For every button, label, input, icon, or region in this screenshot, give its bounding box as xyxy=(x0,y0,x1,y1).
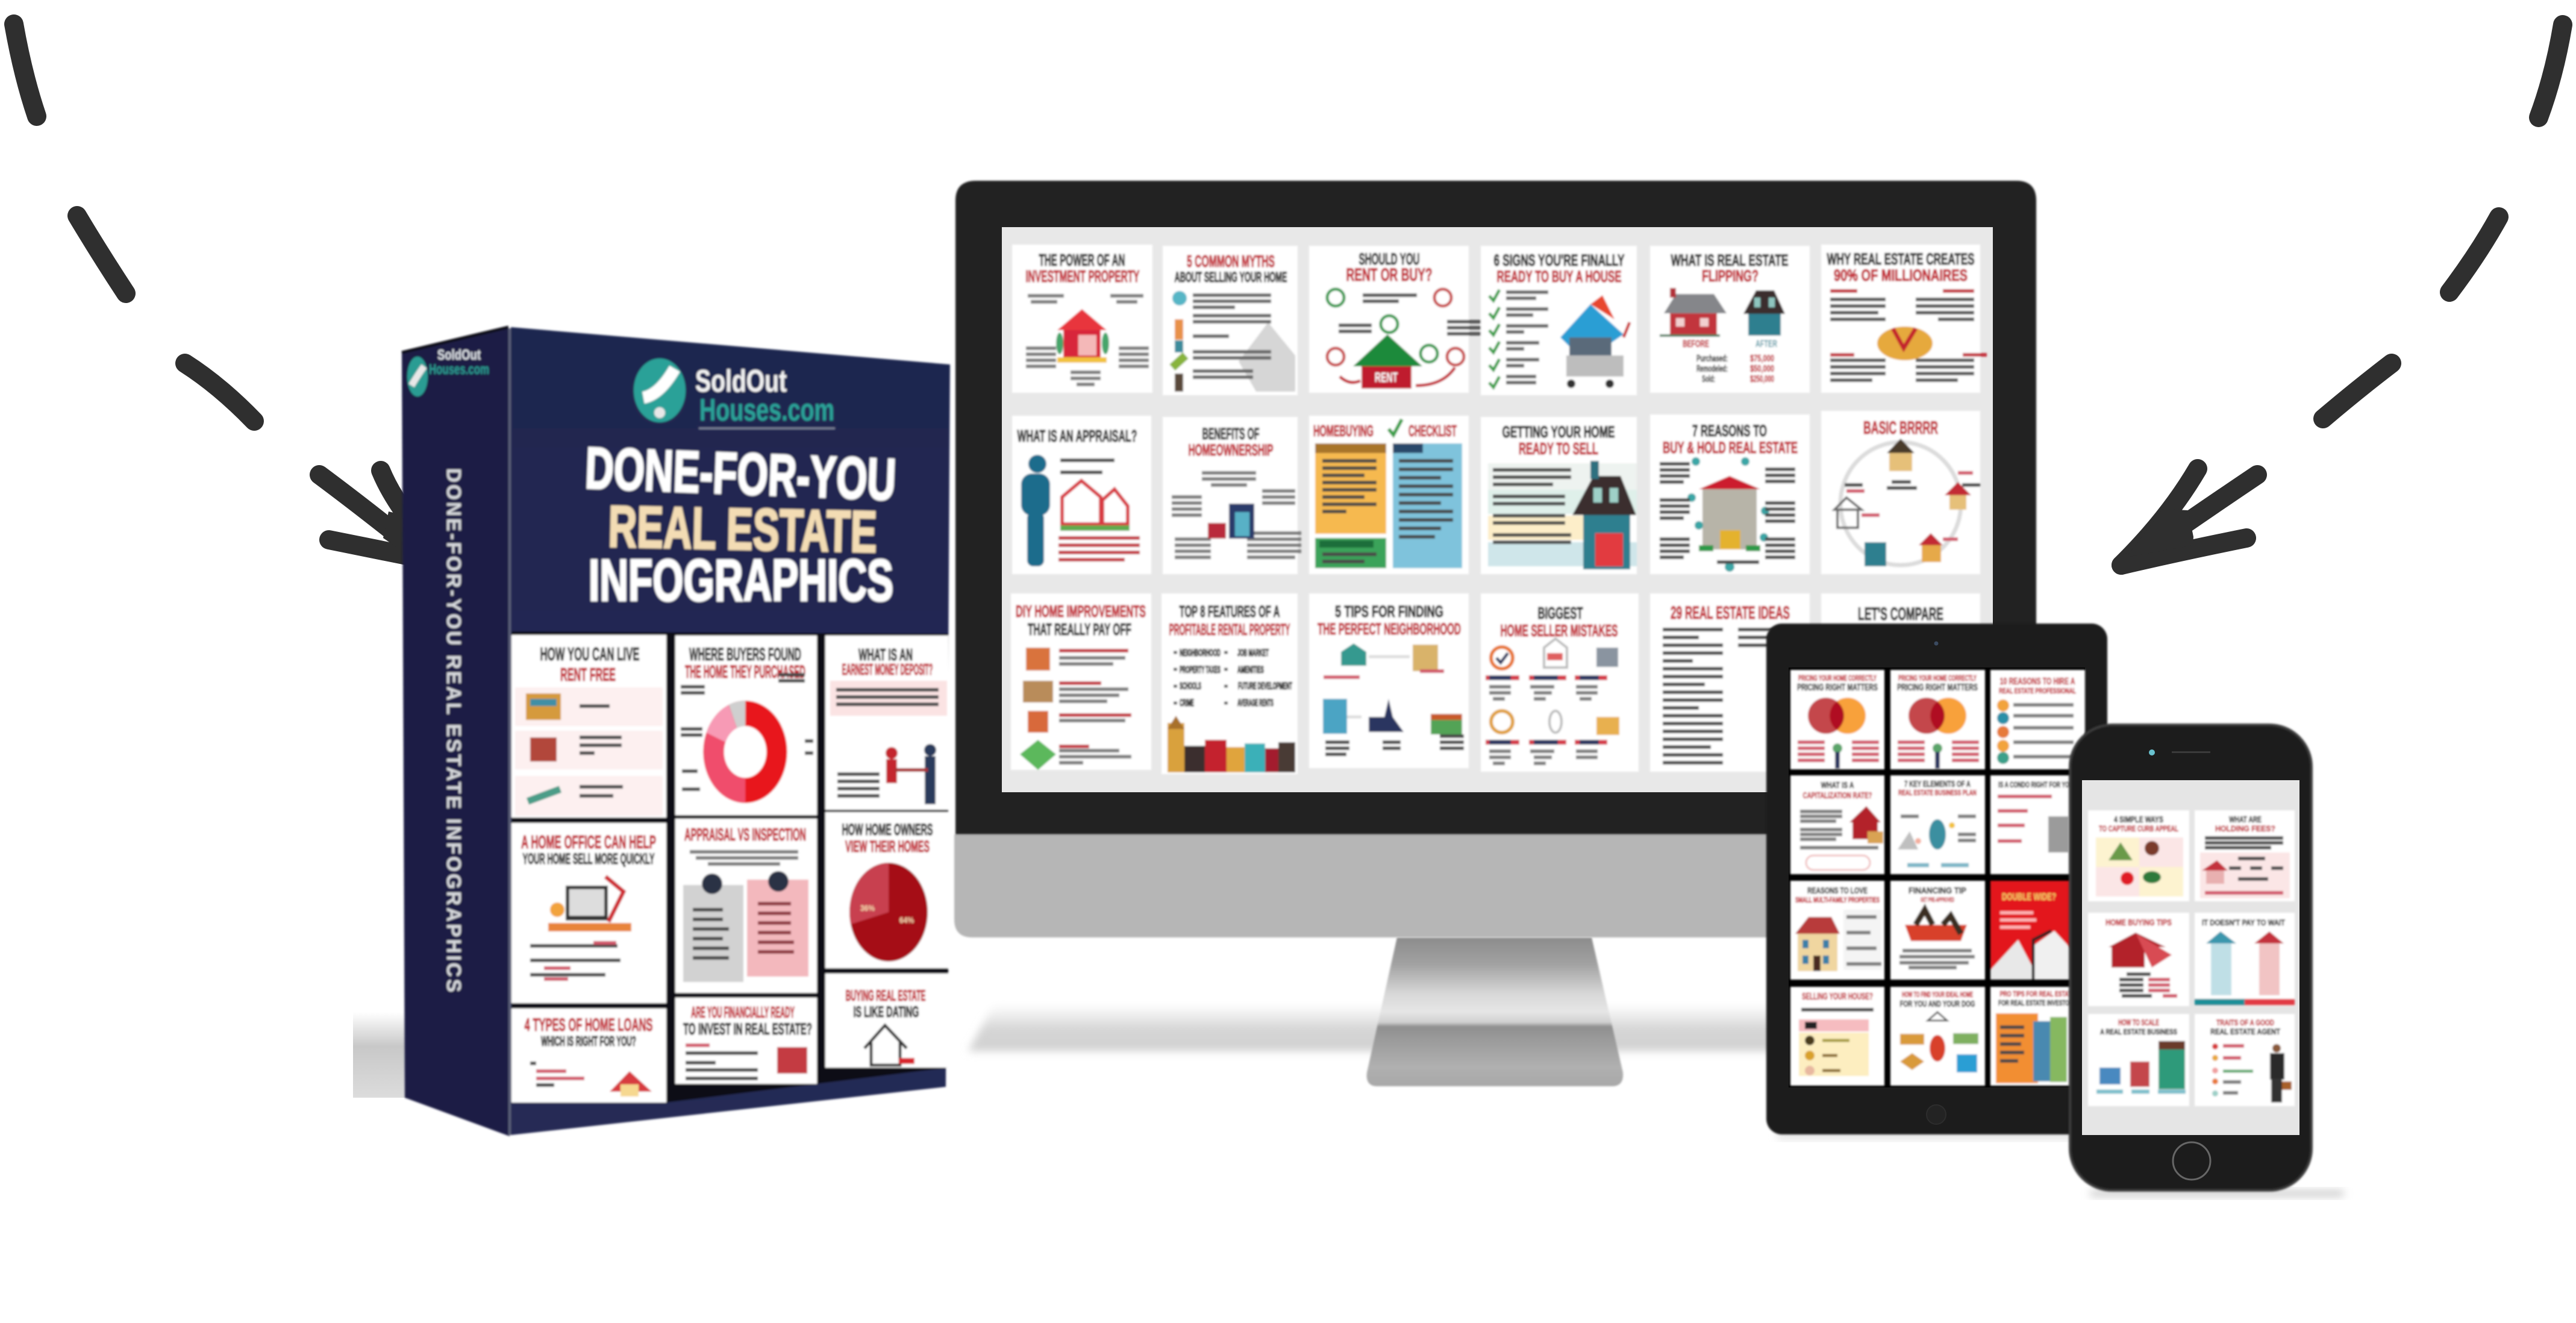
box card: like dating xyxy=(825,974,948,1068)
box card: pie chart: VIEW THEIR HOMES xyxy=(845,837,930,855)
phone card: scale business: HOW TO SCALE xyxy=(2118,1018,2159,1028)
tablet card: double wide xyxy=(1990,881,2085,980)
box card: home office xyxy=(511,823,666,1003)
box front face xyxy=(511,327,950,1135)
box card: rent free: RENT FREE xyxy=(560,664,616,685)
tablet card: pricing right matters B: PRICING YOUR HOME CORRECTLY xyxy=(1898,673,1977,683)
tablet screen xyxy=(1789,668,2085,1087)
screen card: let's compare xyxy=(1821,593,1980,772)
screen card: rental features: AMENITIES xyxy=(1237,664,1264,675)
screen card: six signs xyxy=(1481,246,1637,395)
monitor stand xyxy=(1367,937,1623,1086)
screen card: perfect neighborhood: THE PERFECT NEIGHBORHOOD xyxy=(1318,620,1461,638)
screen card: rental features: PROPERTY TAXES xyxy=(1180,664,1221,675)
phone card: scale business xyxy=(2088,1014,2189,1106)
tablet card: reasons to hire: REAL ESTATE PROFESSIONAL xyxy=(1999,686,2076,695)
monitor: FUTURE DEVELOPMENT xyxy=(1238,680,1292,692)
tablet card: capitalization rate: CAPITALIZATION RATE? xyxy=(1802,790,1872,801)
monitor bezel xyxy=(955,181,2036,834)
tablet card: condo: IS A CONDO RIGHT FOR YOU? xyxy=(1998,780,2077,789)
screen card: real estate flipping xyxy=(1650,246,1810,393)
screen card: common myths: ABOUT SELLING YOUR HOME xyxy=(1175,269,1287,286)
tablet card: selling your house: SELLING YOUR HOUSE? xyxy=(1802,992,1873,1002)
monitor: PROFITABLE RENTAL PROPERTY xyxy=(1169,621,1290,639)
front logo: Houses.com xyxy=(699,393,834,428)
screen card: rent or buy: SHOULD YOU xyxy=(1359,250,1419,268)
screen card: common myths: 5 COMMON MYTHS xyxy=(1187,252,1275,271)
phone body xyxy=(2070,725,2312,1190)
screen card: rental features: SCHOOLS xyxy=(1180,680,1201,692)
box title xyxy=(584,434,897,613)
phone camera xyxy=(2149,749,2155,755)
screen card: millionaires: 90% OF MILLIONAIRES xyxy=(1834,266,1968,284)
screen card: perfect neighborhood: 5 TIPS FOR FINDING xyxy=(1335,602,1443,621)
tablet card: double wide: DOUBLE WIDE? xyxy=(2002,891,2056,902)
phone card: holding fees: WHAT ARE xyxy=(2229,815,2262,825)
tablet xyxy=(1766,624,2107,1134)
tablet card: pro tips: FOR REAL ESTATE INVESTORS xyxy=(1998,998,2077,1007)
box card: donut chart: WHERE BUYERS FOUND xyxy=(689,645,801,665)
screen card: rental features: NEIGHBORHOOD xyxy=(1180,647,1221,658)
box card: financially ready: TO INVEST IN REAL ESTATE? xyxy=(683,1020,812,1038)
phone card: curb appeal: TO CAPTURE CURB APPEAL xyxy=(2099,824,2178,833)
side vertical title: DONE-FOR-YOU REAL ESTATE INFOGRAPHICS xyxy=(443,468,465,992)
screen card: seven reasons: BUY & HOLD REAL ESTATE xyxy=(1663,439,1798,457)
screen card: seven reasons: 7 REASONS TO xyxy=(1692,422,1767,440)
tablet card: financing tip: FINANCING TIP xyxy=(1909,886,1966,896)
screen card: real estate flipping: $250,000 xyxy=(1750,374,1774,384)
tablet card: multi-family xyxy=(1790,881,1884,980)
screen card: homebuying checklist: HOMEBUYING xyxy=(1313,422,1374,440)
phone speaker xyxy=(2172,751,2210,753)
screen card: real estate flipping: $50,000 xyxy=(1750,364,1774,374)
tablet card: financing tip xyxy=(1890,881,1985,980)
phone card: curb appeal xyxy=(2088,810,2189,901)
box card: pie chart: HOW HOME OWNERS xyxy=(842,821,933,839)
screen card: seven reasons xyxy=(1650,414,1810,574)
screen card: six signs: READY TO BUY A HOUSE xyxy=(1496,267,1622,286)
phone card: doesn't pay to wait: IT DOESN'T PAY TO WAIT xyxy=(2202,918,2285,927)
screen card: common myths xyxy=(1163,246,1298,395)
front logo: SoldOut xyxy=(695,364,787,399)
tablet card: capitalization rate xyxy=(1790,775,1884,874)
screen card: benefits of homeownership: BENEFITS OF xyxy=(1202,425,1259,443)
front logo xyxy=(634,358,835,428)
phone card: holding fees xyxy=(2195,810,2295,901)
screen card: DIY improvements xyxy=(1011,593,1151,770)
monitor xyxy=(954,181,2037,1086)
box card: home loans: 4 TYPES OF HOME LOANS xyxy=(524,1015,653,1035)
screen card: rent or buy: RENT xyxy=(1375,370,1398,385)
tablet card: home for you and your dog: FOR YOU AND YOUR DOG xyxy=(1900,999,1975,1009)
phone card: holding fees: HOLDING FEES? xyxy=(2215,824,2275,833)
phone home button xyxy=(2173,1142,2210,1180)
tablet card: business plan xyxy=(1890,775,1985,874)
screen card: rental features xyxy=(1161,593,1298,774)
tablet card: business plan: 7 KEY ELEMENTS OF A xyxy=(1904,779,1971,789)
tablet shadow xyxy=(1777,1133,2090,1139)
tablet card: financing tip: GET PRE-APPROVED xyxy=(1921,896,1954,904)
screen card: perfect neighborhood xyxy=(1309,593,1469,768)
screen card: let's compare: LET'S COMPARE xyxy=(1858,604,1943,624)
box title: REAL ESTATE xyxy=(608,493,878,565)
screen card: benefits of homeownership: HOMEOWNERSHIP xyxy=(1188,441,1274,459)
screen card: ready to sell: READY TO SELL xyxy=(1519,439,1598,458)
box top edge xyxy=(402,327,508,352)
box card: earnest money xyxy=(825,636,948,810)
tablet card: pricing right matters B: PRICING RIGHT MATTERS xyxy=(1897,683,1978,693)
box card: pie chart: 64% xyxy=(899,915,914,925)
phone card: good agent xyxy=(2195,1014,2295,1106)
screen card: benefits of homeownership xyxy=(1163,417,1301,574)
tablet card: condo xyxy=(1990,775,2085,874)
screen card: real estate flipping: BEFORE xyxy=(1683,338,1709,349)
box card: pie chart xyxy=(825,812,948,968)
box card: financially ready xyxy=(675,998,817,1084)
tablet card: home for you and your dog: HOW TO FIND YOUR IDEAL HOME xyxy=(1902,990,1973,999)
tablet card: reasons to hire: 10 REASONS TO HIRE A xyxy=(2000,677,2075,687)
arrow: dashed right arrow pointing at the monitor xyxy=(2121,25,2563,565)
screen card: rent or buy xyxy=(1309,246,1483,393)
phone card: home buying tips: HOME BUYING TIPS xyxy=(2106,918,2172,928)
screen card: seller mistakes: BIGGEST xyxy=(1537,604,1583,622)
screen card: real estate ideas: 29 REAL ESTATE IDEAS xyxy=(1671,603,1790,623)
phone card: scale business: A REAL ESTATE BUSINESS xyxy=(2100,1027,2177,1036)
box card: like dating: BUYING REAL ESTATE xyxy=(846,987,925,1004)
box card: home office: YOUR HOME SELL MORE QUICKLY xyxy=(523,851,655,868)
product box xyxy=(402,327,950,1136)
phone card: home buying tips xyxy=(2088,913,2189,1006)
box title: DONE-FOR-YOU xyxy=(584,434,897,513)
tablet card: pricing right matters A: PRICING RIGHT MATTERS xyxy=(1797,683,1878,693)
box card: donut chart xyxy=(675,636,817,815)
phone shadow xyxy=(2090,1190,2343,1196)
phone screen xyxy=(2082,780,2299,1135)
box card: appraisal vs inspection: APPRAISAL VS INSPECTION xyxy=(684,825,806,845)
box shadow xyxy=(353,1012,407,1098)
screen card: power of an investment property: THE POWER OF AN xyxy=(1039,251,1125,269)
screen card: millionaires xyxy=(1821,245,1987,393)
screen card: appraisal xyxy=(1012,416,1151,574)
box card: appraisal vs inspection xyxy=(675,819,817,993)
screen card: rental features: AVERAGE RENTS xyxy=(1237,697,1274,708)
screen card: real estate flipping: WHAT IS REAL ESTATE xyxy=(1671,251,1788,269)
tablet card: pro tips xyxy=(1990,987,2085,1086)
screen card: real estate ideas xyxy=(1650,593,1810,772)
box card: home office: A HOME OFFICE CAN HELP xyxy=(521,831,656,852)
screen card: power of an investment property: INVESTMENT PROPERTY xyxy=(1025,267,1140,286)
tablet card: home for you and your dog xyxy=(1890,987,1985,1086)
screen card: appraisal: WHAT IS AN APPRAISAL? xyxy=(1017,427,1137,445)
tablet camera xyxy=(1934,641,1939,646)
text: EARNEST MONEY DEPOSIT? xyxy=(842,660,933,678)
screen card: homebuying checklist: CHECKLIST xyxy=(1408,422,1457,440)
box card: pie chart: 36% xyxy=(860,903,875,913)
tablet card: pricing right matters B xyxy=(1890,670,1985,769)
tablet home button xyxy=(1927,1105,1946,1124)
screen card: real estate flipping: Remodeled: xyxy=(1696,364,1728,374)
screen card: basic BRRRR: BASIC BRRRR xyxy=(1863,418,1938,438)
tablet card: business plan: REAL ESTATE BUSINESS PLAN xyxy=(1898,788,1977,797)
box card: like dating: IS LIKE DATING xyxy=(853,1004,919,1021)
box card grid backing xyxy=(511,631,948,1102)
screen card: seller mistakes xyxy=(1481,593,1639,772)
screen card: rent or buy: RENT OR BUY? xyxy=(1346,265,1433,285)
box card: financially ready: ARE YOU FINANCIALLY READY xyxy=(691,1003,795,1021)
tablet body xyxy=(1766,624,2107,1134)
tablet card: pro tips: PRO TIPS FOR REAL ESTATE xyxy=(2000,989,2075,998)
side logo: SoldOut xyxy=(437,347,481,363)
tablet card: selling your house xyxy=(1790,987,1884,1086)
screen card: basic BRRRR xyxy=(1821,411,1980,574)
phone card: good agent: TRAITS OF A GOOD xyxy=(2216,1018,2274,1027)
box card: rent free: HOW YOU CAN LIVE xyxy=(540,643,640,665)
box card: rent free xyxy=(511,635,666,818)
screen card: millionaires: WHY REAL ESTATE CREATES xyxy=(1827,250,1975,268)
tablet card: pricing right matters A xyxy=(1790,670,1884,769)
screen card: real estate flipping: $75,000 xyxy=(1750,354,1774,364)
monitor chin xyxy=(954,834,2037,937)
screen card: power of an investment property xyxy=(1012,245,1152,393)
tablet card: multi-family: REASONS TO LOVE xyxy=(1807,886,1868,896)
tablet card: multi-family: SMALL MULTI-FAMILY PROPERTIES xyxy=(1795,895,1880,904)
screen card: ready to sell xyxy=(1481,417,1637,574)
screen card: real estate flipping: Purchased: xyxy=(1696,354,1728,364)
screen card: seller mistakes: HOME SELLER MISTAKES xyxy=(1500,621,1618,640)
box card: home loans xyxy=(511,1009,666,1102)
tablet card: pricing right matters A: PRICING YOUR HOME CORRECTLY xyxy=(1798,673,1877,683)
screen card: rental features: JOB MARKET xyxy=(1237,647,1269,658)
screen card: real estate flipping: AFTER xyxy=(1755,338,1777,349)
screen card: DIY improvements: THAT REALLY PAY OFF xyxy=(1028,620,1131,639)
box title: INFOGRAPHICS xyxy=(589,547,893,613)
screen card: DIY improvements: DIY HOME IMPROVEMENTS xyxy=(1016,602,1146,621)
box side face xyxy=(402,327,510,1136)
tablet card: capitalization rate: WHAT IS A xyxy=(1821,780,1854,790)
phone xyxy=(2070,725,2312,1190)
product box: THE HOME THEY PURCHASED xyxy=(685,662,805,682)
phone card: good agent: REAL ESTATE AGENT xyxy=(2210,1027,2280,1036)
side logo xyxy=(407,347,489,396)
screen card: six signs: 6 SIGNS YOU'RE FINALLY xyxy=(1494,251,1624,269)
screen card: rental features: TOP 8 FEATURES OF A xyxy=(1180,602,1280,621)
screen card: real estate flipping: FLIPPING? xyxy=(1702,267,1758,285)
box card: earnest money: WHAT IS AN xyxy=(858,645,913,664)
screen card: ready to sell: GETTING YOUR HOME xyxy=(1502,423,1615,441)
screen card: homebuying checklist xyxy=(1309,416,1469,574)
side logo: Houses.com xyxy=(429,361,489,378)
monitor screen xyxy=(1002,227,1993,792)
tablet card: reasons to hire xyxy=(1990,670,2085,769)
monitor shadow xyxy=(968,1004,1783,1051)
phone card: doesn't pay to wait xyxy=(2195,913,2295,1006)
phone card: curb appeal: 4 SIMPLE WAYS xyxy=(2114,815,2163,825)
box card: home loans: WHICH IS RIGHT FOR YOU? xyxy=(541,1033,636,1049)
box crease xyxy=(508,328,511,1135)
arrow: dashed left arrow pointing at the box xyxy=(14,24,416,560)
screen card: real estate flipping: Sold: xyxy=(1702,374,1715,384)
screen card: rental features: CRIME xyxy=(1180,697,1194,708)
